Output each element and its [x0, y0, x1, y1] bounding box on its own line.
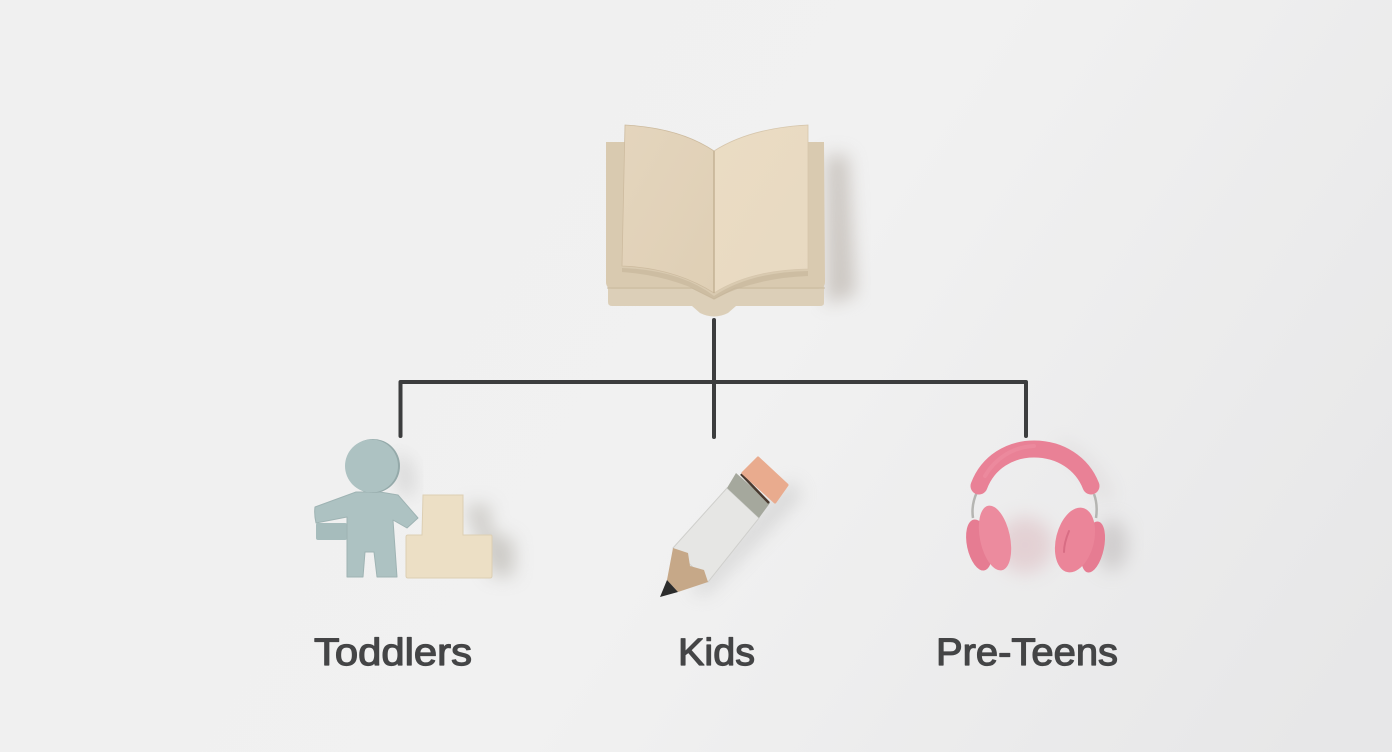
ferrule: [727, 473, 770, 518]
right page: [714, 125, 808, 293]
icon: headphones: [962, 445, 1128, 577]
figure: [315, 492, 418, 577]
head: [346, 439, 400, 493]
connector tree: [400, 320, 1026, 437]
pencil body: [673, 488, 759, 582]
icon: toddler with blocks: [315, 439, 514, 578]
eraser: [743, 458, 787, 502]
blocks: [406, 495, 492, 578]
pencil lead: [660, 580, 678, 597]
label: Kids: Kids: [678, 632, 755, 674]
icon: open book: [606, 125, 856, 316]
left page: [622, 125, 714, 293]
rings: [972, 492, 1097, 518]
label: Pre-Teens: Pre-Teens: [936, 632, 1118, 674]
band: [979, 449, 1091, 486]
pencil wood: [667, 548, 708, 592]
icon: pencil: [660, 458, 802, 597]
right cup: [1077, 519, 1109, 575]
left cup: [962, 517, 996, 573]
label: Toddlers: Toddlers: [314, 632, 472, 674]
small block: [316, 523, 347, 540]
